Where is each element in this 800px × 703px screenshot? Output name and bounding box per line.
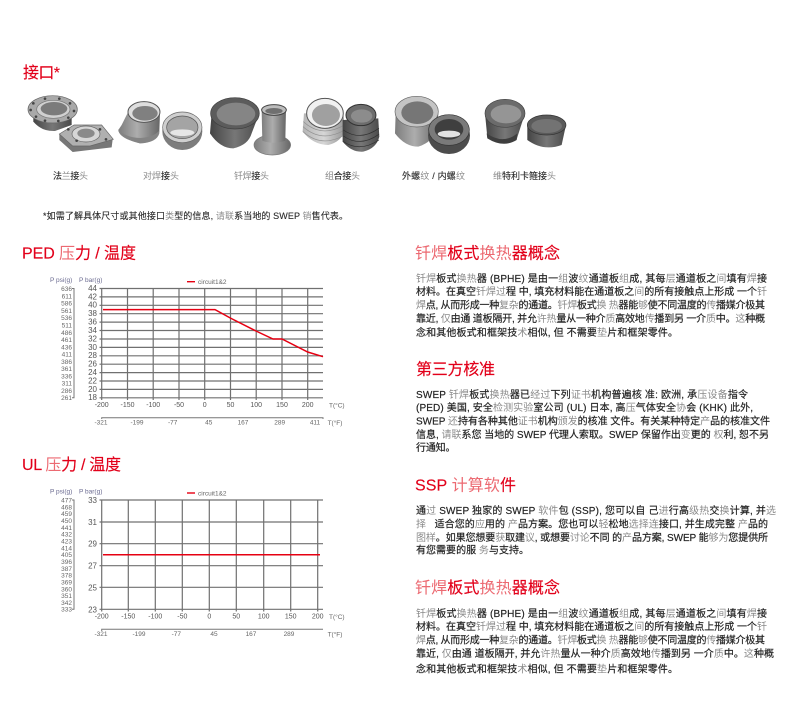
fahrenheit axis: -321 [94,420,108,426]
celsius axis labels: 0 [203,402,207,409]
psi axis: 286 [61,388,72,395]
psi axis [61,286,74,402]
bar axis labels: 42 [88,292,98,301]
line chart: PED [50,277,345,427]
psi axis: 360 [61,586,72,593]
psi axis: 477 [61,498,72,504]
psi axis: 414 [61,545,72,552]
icon: male and female thread connection [395,96,470,154]
label: brazed: 钎焊接头 [234,170,269,181]
data line: circuit 1&2 [103,554,320,556]
fahrenheit axis: T(°F) [328,419,342,427]
fahrenheit axis: -199 [130,420,144,426]
axis titles: P bar(g) [79,488,102,496]
celsius axis labels: -150 [120,402,135,409]
fahrenheit axis: 411 [310,420,321,426]
psi axis: 261 [61,395,72,402]
psi axis: 387 [61,566,72,573]
psi axis: 636 [61,286,72,293]
icon: butt weld connection [118,102,202,150]
celsius axis labels: -100 [146,402,160,409]
fahrenheit axis: -77 [168,420,178,426]
bar axis labels [88,284,98,402]
bar axis labels: 38 [88,309,98,318]
text block: SSP software [415,476,776,556]
psi axis: 611 [62,293,72,300]
paragraph: 念和其他板式和框架技术相似, 但 不需要垫片和框架零件。 [416,326,678,339]
fahrenheit axis: 289 [284,631,295,638]
psi axis: 561 [61,308,72,315]
paragraph: 材料。在真空钎焊过程 中, 填充材料能在通道板之间的所有接触点上形成 一个钎 [416,620,767,633]
celsius axis labels: 200 [302,402,314,409]
psi axis: 405 [61,552,72,559]
fahrenheit axis: 289 [274,420,286,426]
heading: 第三方核准 [416,360,495,378]
psi axis: 441 [61,525,72,532]
paragraph: 焊点, 从而形成一种复杂的通道。钎焊板式换 热器能够使不同温度的传播媒介极其 [416,634,765,646]
celsius axis labels: -50 [174,402,184,409]
psi axis: 536 [61,315,72,322]
bar axis labels: 23 [88,605,98,614]
data line: circuit 1&2 [103,310,323,357]
bar axis labels: 33 [88,496,98,505]
bar axis labels: 30 [88,343,98,352]
heading: 钎焊板式换热器概念 [415,244,560,262]
paragraph: 靠近, 仅由通 道板隔开, 并允许热量从一种介质高效地传播到另 一介质中。这种概 [416,312,765,325]
psi axis: 311 [62,381,72,388]
label: flange: 法兰接头 [53,170,88,181]
celsius axis labels: -200 [95,402,109,409]
psi axis: 486 [61,330,72,337]
paragraph: 有您需要的服 务与支持。 [416,544,529,556]
heading: UL pressure temperature: UL 压力 / 温度 [22,456,121,474]
celsius axis labels: -150 [121,614,135,620]
psi axis: 511 [62,322,72,330]
bar axis labels: 31 [88,518,98,527]
paragraph [416,272,767,339]
bar axis labels: 27 [88,562,98,571]
bar axis labels [88,496,98,614]
psi axis: 461 [61,337,72,344]
bar axis labels: 32 [88,334,98,343]
label: victaulic: 维特利卡箍接头 [493,170,556,181]
heading: PED pressure temperature: PED 压力 / 温度 [22,244,136,262]
psi axis: 432 [61,532,72,539]
psi axis: 468 [61,504,72,511]
celsius axis labels: -100 [148,614,162,620]
fahrenheit axis: T(°F) [328,630,342,638]
bar axis labels: 25 [88,583,98,592]
celsius axis labels: 200 [312,614,324,620]
bar axis labels: 44 [88,284,98,293]
paragraph: 行通知。 [416,441,456,454]
label: union: 组合接头 [325,170,360,181]
celsius axis labels [95,614,324,620]
heading: SSP 计算软件 [415,476,516,494]
label: thread: 外螺纹 / 内螺纹 [402,170,465,181]
celsius axis labels: 100 [250,402,262,409]
label: butt weld: 对焊接头 [143,170,179,181]
celsius axis labels: -200 [95,614,109,620]
fahrenheit axis: -77 [172,631,181,638]
axis titles: P psi(g) [50,277,72,284]
icon: victaulic clamp connection [485,99,566,147]
psi axis: 411 [62,352,72,359]
heading: 钎焊板式换热器概念 [415,578,560,597]
psi axis: 450 [61,518,72,525]
fahrenheit axis [94,418,342,427]
paragraph: 钎焊板式换热器 (BPHE) 是由一组波纹通道板组成, 其每层通道板之间填有焊接 [416,607,767,620]
paragraph: 材料。在真空钎焊过程 中, 填充材料能在通道板之间的所有接触点上形成 一个钎 [416,285,767,298]
psi axis: 336 [61,373,72,380]
psi axis: 378 [61,573,72,580]
bar axis labels: 28 [88,351,98,360]
axis titles [50,488,102,496]
celsius axis title: T(°C) [329,613,345,621]
text block: BPHE concept repeated [415,578,774,676]
paragraph [416,388,770,454]
text block: BPHE concept [415,244,767,339]
paragraph [416,607,774,676]
paragraph: 念和其他板式和框架技术相似, 但 不需要垫片和框架零件。 [416,662,678,676]
psi axis: 386 [61,359,72,366]
bar axis labels: 22 [88,376,98,385]
footnote: *如需了解具体尺寸或其他接口类型的信息, 请联系当地的 SWEP 销售代表。 [43,210,348,221]
section: connections [23,64,566,221]
celsius axis labels: 0 [207,614,211,620]
paragraph: 焊点, 从而形成一种复杂的通道。钎焊板式换 热器能够使不同温度的传播媒介极其 [416,298,765,312]
paragraph: 信息, 请联系您 当地的 SWEP 代理人索取。SWEP 保留作出变更的 权利, 恕不另 [416,428,769,441]
psi axis: 436 [61,344,72,351]
fahrenheit axis: 45 [210,631,218,638]
psi axis: 351 [61,593,72,600]
celsius axis labels: 150 [276,402,288,409]
celsius axis labels: 50 [232,614,240,620]
line chart: UL [50,488,345,638]
bar axis labels: 20 [88,385,98,394]
paragraph: SWEP 钎焊板式换热器已经过下列证书机构普遍核 准: 欧洲, 承压设备指令 [416,388,748,401]
section: UL chart [22,456,345,638]
bar axis labels: 26 [88,360,98,369]
psi axis: 396 [61,559,72,566]
paragraph: SWEP 还持有各种其他证书机构颁发的核准 文件。有关某种特定产品的核准文件 [416,414,770,428]
icon: brazed connection [210,98,291,155]
celsius axis labels [95,402,314,409]
bar axis labels: 36 [88,318,98,326]
paragraph: 靠近, 仅由通 道板隔开, 并允许热量从一种介质高效地传播到另 一介质中。这种概 [416,647,774,660]
axis titles: P psi(g) [50,488,72,496]
heading: connections: 接口* [23,64,60,82]
bar axis labels: 34 [88,326,98,335]
celsius axis title: T(°C) [329,402,345,410]
celsius axis labels: 100 [258,614,270,620]
psi axis: 333 [61,606,72,614]
psi axis: 369 [61,580,72,586]
paragraph: 通过 SWEP 独家的 SWEP 软件包 (SSP), 您可以自 己进行高级热交换计算, 并选 [416,504,776,517]
fahrenheit axis: 167 [238,420,249,426]
psi axis: 361 [61,366,72,373]
celsius axis labels: 150 [285,614,297,620]
text block: third party approval [416,360,770,454]
fahrenheit axis: -321 [94,631,108,638]
fahrenheit axis: 167 [246,631,257,638]
bar axis labels: 24 [88,368,98,377]
celsius axis labels: -50 [177,614,187,620]
axis titles: P bar(g) [79,277,102,284]
legend: circuit1&2 [198,490,227,497]
fahrenheit axis: 45 [205,420,213,426]
paragraph: (PED) 美国, 安全检测实验室公司 (UL) 日本, 高压气体安全协会 (KHK) 此外, [416,401,753,414]
paragraph: 钎焊板式换热器 (BPHE) 是由一组波纹通道板组成, 其每层通道板之间填有焊接 [416,272,767,285]
icon: union connection [303,98,379,152]
fahrenheit axis [94,629,342,638]
section: PED chart [22,244,345,427]
paragraph: 择 适合您的应用的 产品方案。您也可以轻松地选择连接口, 并生成完整 产品的 [416,518,768,530]
psi axis: 459 [61,511,72,518]
celsius axis labels: 50 [227,402,234,409]
bar axis labels: 40 [88,301,98,310]
paragraph [416,504,776,556]
fahrenheit axis: -199 [132,631,146,638]
psi axis: 423 [61,538,72,546]
icon: flange connection [28,96,113,152]
bar axis labels: 29 [88,540,98,549]
paragraph: 图样。如果您想要获取建议, 或想要讨论不同 的产品方案, SWEP 能够为您提供所 [416,531,768,544]
axis titles [50,277,102,284]
psi axis [61,498,74,614]
legend: circuit1&2 [198,279,227,286]
bar axis labels: 18 [88,393,98,402]
psi axis: 342 [61,600,72,607]
psi axis: 586 [61,301,72,308]
